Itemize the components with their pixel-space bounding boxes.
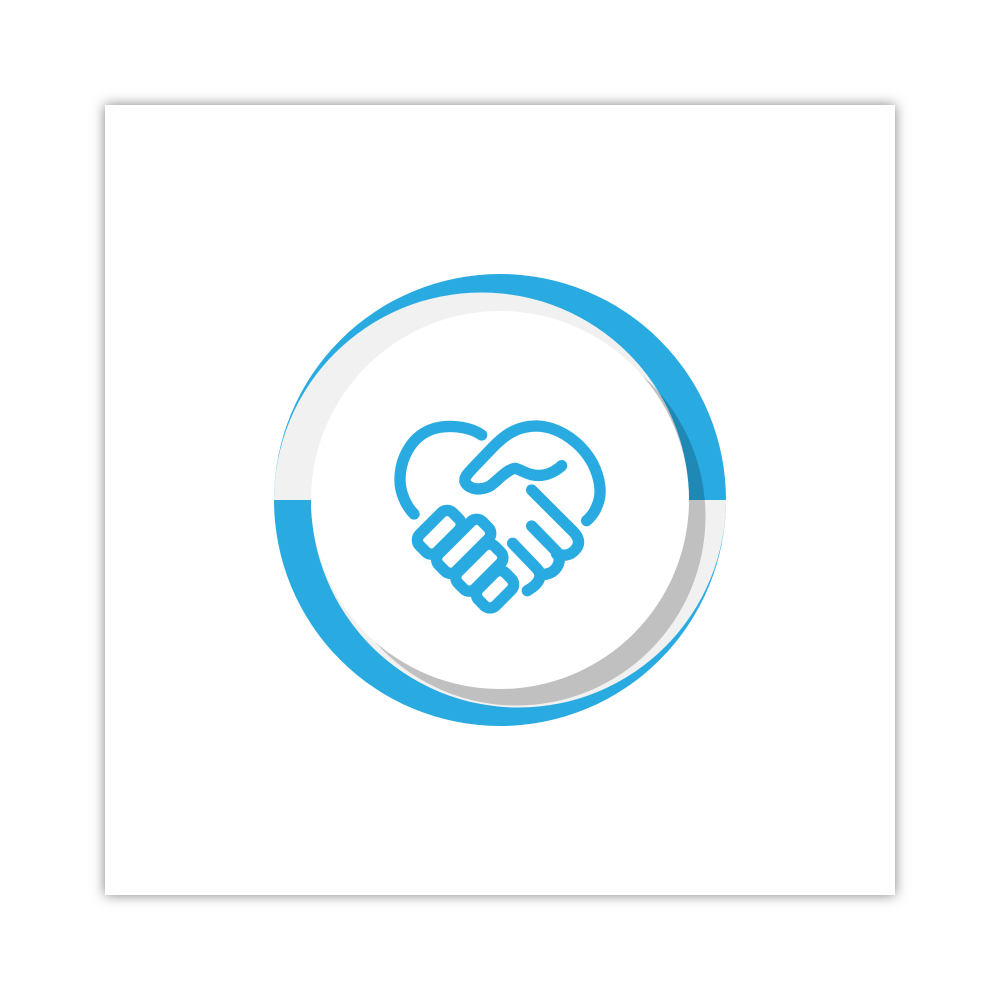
icon: handshake forming a heart (400, 426, 600, 611)
icon: knuckle 2 (433, 516, 494, 577)
inner disk hard shadow (328, 328, 706, 706)
icon: middle finger (532, 526, 559, 574)
panel: white card with soft shadow (105, 105, 895, 895)
ring: light grey lower crescent (311, 500, 726, 708)
icon: knuckle 3 (452, 541, 506, 595)
icon: right hand and heart arc (465, 426, 600, 521)
inner white disk (311, 311, 689, 689)
icon: left heart arc (400, 426, 482, 514)
icon: outer finger (532, 490, 579, 555)
ring: light grey upper crescent (274, 293, 689, 500)
badge: circular ring with icon (274, 274, 726, 726)
icon: lower finger (513, 543, 540, 591)
icon: knuckle 1 (414, 507, 465, 558)
ring: blue outer disk (274, 274, 726, 726)
icon: knuckle 4 (473, 567, 517, 611)
